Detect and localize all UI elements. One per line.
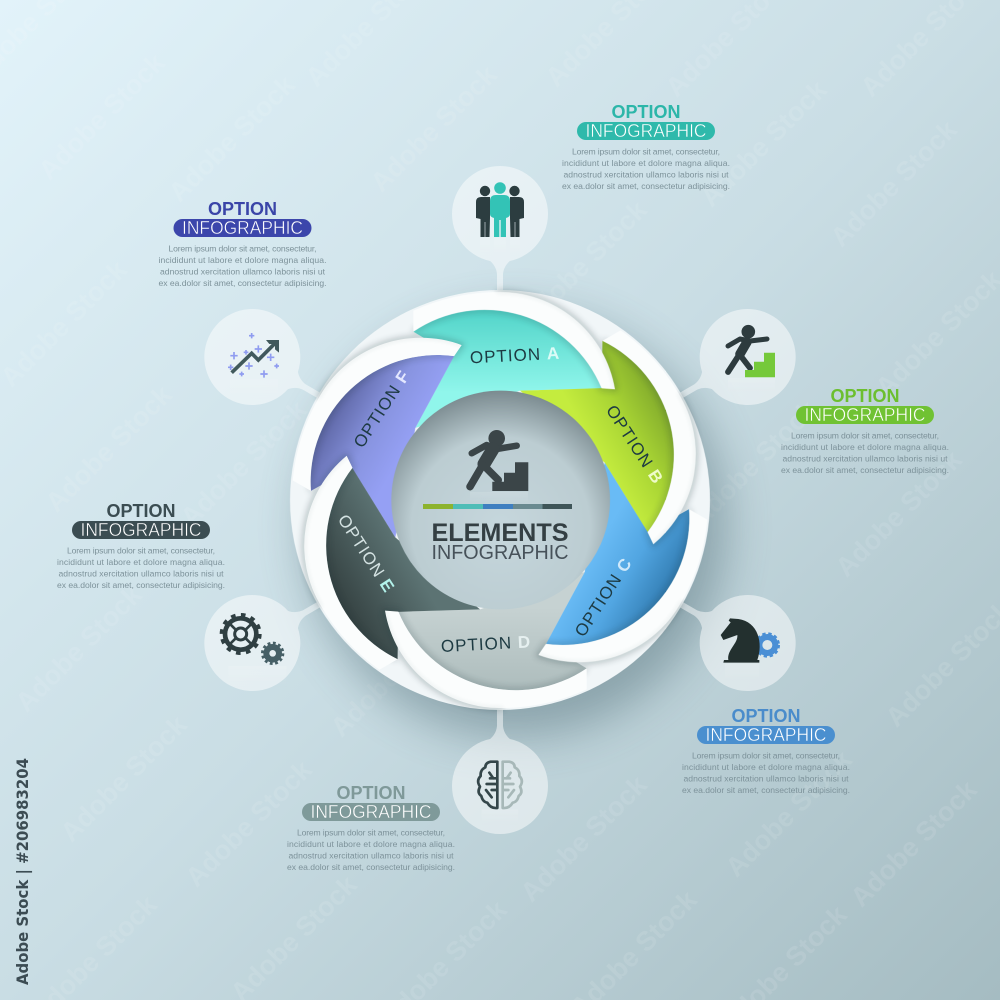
watermark: Adobe Stock — [845, 774, 983, 913]
callout C — [682, 706, 850, 795]
callout D: incididunt ut labore et dolore magna aliqua. — [287, 839, 455, 849]
icon: knight and gear — [721, 618, 779, 682]
callout D: Lorem ipsum dolor sit amet, consectetur, — [297, 828, 445, 838]
callout F — [158, 199, 326, 288]
watermark: Adobe Stock — [33, 47, 171, 186]
callout F: OPTION — [208, 199, 277, 219]
callout A: Lorem ipsum dolor sit amet, consectetur, — [572, 146, 720, 156]
segment E colour — [284, 448, 481, 670]
wheel drop shadow — [303, 313, 727, 737]
stock id caption: Adobe Stock | #206983204 — [13, 758, 33, 985]
callout E: OPTION — [106, 501, 176, 521]
callout A: adnostrud xercitation ullamco laboris nisi ut — [564, 170, 729, 180]
callout C: ex ea.dolor sit amet, consectetur adipisicing. — [682, 785, 850, 795]
watermark: Adobe Stock — [720, 744, 858, 883]
segment label B: OPTION B — [602, 402, 667, 488]
colour bar — [423, 504, 572, 509]
callout A — [562, 102, 730, 191]
connector bubbles — [187, 166, 813, 834]
bubble B — [654, 291, 813, 439]
watermark: Adobe Stock — [830, 444, 968, 583]
callout E — [57, 501, 225, 590]
circular wheel — [262, 290, 738, 710]
icon: people — [476, 182, 524, 258]
callout A: incididunt ut labore et dolore magna aliqua. — [562, 158, 730, 168]
bubble E — [187, 561, 346, 709]
segment label C: OPTION C — [571, 554, 636, 640]
callout B: OPTION — [830, 386, 900, 406]
callout F: INFOGRAPHIC — [182, 218, 303, 238]
callout A: ex ea.dolor sit amet, consectetur adipisicing. — [562, 181, 730, 191]
watermark: Adobe Stock — [10, 579, 148, 718]
watermark: Adobe Stock — [695, 74, 833, 213]
callout C: OPTION — [731, 706, 801, 726]
callout B — [781, 386, 949, 475]
icon: growth arrow — [228, 333, 279, 400]
icon: gears — [221, 615, 287, 687]
band D — [385, 611, 587, 708]
white bands — [262, 292, 738, 708]
band outer edge shading — [262, 292, 738, 708]
callout B: adnostrud xercitation ullamco laboris nisi ut — [782, 454, 948, 464]
callout E: ex ea.dolor sit amet, consectetur adipisicing. — [57, 580, 225, 590]
callout F: adnostrud xercitation ullamco laboris nisi ut — [160, 266, 326, 276]
segment label D: OPTION D — [440, 632, 532, 656]
callout C: INFOGRAPHIC — [706, 725, 826, 745]
watermark: Adobe Stock — [325, 604, 463, 743]
callout C: Lorem ipsum dolor sit amet, consectetur, — [692, 750, 840, 760]
callout A: OPTION — [611, 102, 681, 122]
bubble D — [452, 706, 548, 834]
band A — [413, 292, 615, 389]
callout D — [287, 783, 455, 872]
callout B: Lorem ipsum dolor sit amet, consectetur, — [791, 430, 939, 440]
watermark: Adobe Stock — [825, 114, 963, 253]
callout C: incididunt ut labore et dolore magna aliqua. — [682, 762, 850, 772]
centre disc — [391, 391, 610, 609]
segment F colour — [292, 317, 488, 539]
segment label A: OPTION A — [469, 344, 561, 367]
segment D colour — [398, 572, 587, 690]
callout D: ex ea.dolor sit amet, consectetur adipisicing. — [287, 862, 455, 872]
callout D: INFOGRAPHIC — [310, 802, 432, 822]
icon: brain — [478, 762, 522, 825]
watermark: Adobe Stock — [163, 69, 301, 208]
callout E: Lorem ipsum dolor sit amet, consectetur, — [67, 546, 215, 556]
band B — [553, 321, 738, 544]
watermark: Adobe Stock — [55, 709, 193, 848]
bubble C — [654, 561, 813, 709]
watermark: Adobe Stock — [515, 769, 653, 908]
band E — [262, 456, 447, 679]
segment label F: OPTION F — [350, 367, 414, 451]
watermark: Adobe Stock — [180, 754, 318, 893]
callout B: INFOGRAPHIC — [804, 405, 926, 425]
watermark: Adobe Stock — [175, 394, 313, 533]
bubble A — [452, 166, 548, 294]
callout A: INFOGRAPHIC — [586, 121, 706, 141]
callout E: INFOGRAPHIC — [80, 520, 202, 540]
callout F: Lorem ipsum dolor sit amet, consectetur, — [168, 244, 316, 254]
callout B: ex ea.dolor sit amet, consectetur adipisicing. — [781, 465, 949, 475]
callout E: incididunt ut labore et dolore magna aliqua. — [57, 557, 225, 567]
callout E: adnostrud xercitation ullamco laboris nisi ut — [58, 568, 224, 578]
callout B: incididunt ut labore et dolore magna aliqua. — [781, 442, 949, 452]
segment A colour — [413, 310, 602, 428]
watermark: Adobe Stock — [685, 394, 823, 533]
centre heading: INFOGRAPHIC — [432, 542, 568, 564]
band C — [538, 480, 724, 704]
callout C: adnostrud xercitation ullamco laboris nisi ut — [684, 774, 849, 784]
watermark: Adobe Stock — [40, 379, 178, 518]
callout D: adnostrud xercitation ullamco laboris nisi ut — [288, 850, 454, 860]
callout D: OPTION — [336, 783, 406, 803]
band shadows on colours — [262, 292, 738, 708]
segment label E: OPTION E — [334, 511, 398, 596]
centre heading: ELEMENTS — [432, 519, 568, 547]
callout F: ex ea.dolor sit amet, consectetur adipisicing. — [158, 278, 326, 288]
icon: centre runner — [470, 430, 528, 504]
icon: stairs runner — [728, 325, 775, 396]
segment B colour — [519, 330, 716, 552]
watermark: Adobe Stock — [365, 59, 503, 198]
band F — [276, 296, 462, 520]
watermark: Adobe Stock — [515, 194, 653, 333]
callout F: incididunt ut labore et dolore magna aliqua. — [158, 255, 326, 265]
wheel base ring — [290, 290, 710, 710]
centre heading — [432, 519, 568, 564]
bubble F — [187, 291, 346, 439]
segment C colour — [512, 461, 708, 683]
